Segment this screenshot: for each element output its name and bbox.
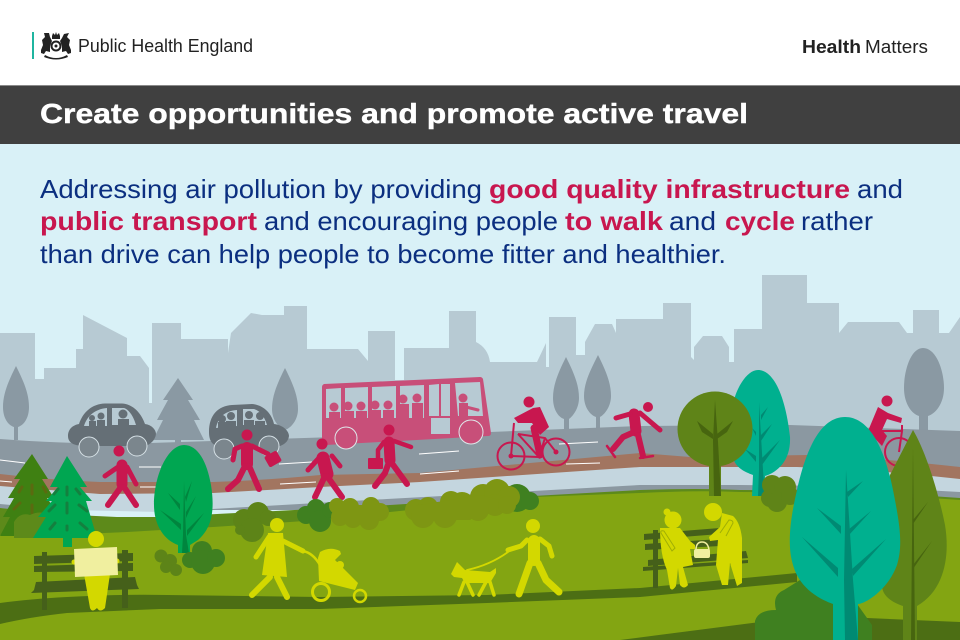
cyclist 1	[498, 396, 570, 470]
big teal tree	[790, 417, 900, 640]
round olive tree	[678, 392, 752, 496]
header: Health Matters	[802, 37, 928, 57]
pedestrians on road	[105, 424, 411, 505]
background grey trees	[3, 348, 944, 446]
person walking 1	[105, 446, 136, 505]
pushchair	[312, 549, 366, 602]
olive bush right	[761, 475, 799, 512]
mustard bush 2	[405, 479, 520, 528]
olive bush	[233, 502, 276, 542]
bus	[322, 377, 491, 449]
person reading newspaper	[72, 531, 120, 610]
cyclist 2	[868, 396, 913, 466]
green bush behind	[503, 484, 539, 512]
intro text: and	[669, 206, 716, 236]
title bar	[0, 85, 960, 144]
header: Health Matters: Health	[802, 37, 861, 57]
intro text: public transport	[40, 206, 257, 236]
bench right	[643, 528, 748, 588]
couple with handbag	[660, 503, 742, 590]
mustard bush 1	[329, 497, 389, 530]
green tree centre-left	[154, 445, 213, 553]
city skyline	[0, 275, 960, 460]
big dark bush	[755, 580, 872, 640]
pine green	[33, 456, 97, 547]
tall olive tree	[882, 430, 947, 640]
intro text	[40, 174, 903, 269]
footpath	[0, 573, 797, 624]
road	[0, 425, 960, 510]
intro text: cycle	[725, 206, 795, 236]
car 1	[68, 404, 156, 457]
header: Health Matters: Matters	[865, 37, 928, 57]
cycle lane	[0, 453, 960, 494]
sky background	[0, 144, 960, 640]
intro text: Addressing air pollution by providing	[40, 174, 482, 204]
man	[704, 503, 742, 586]
person with briefcase	[228, 430, 282, 489]
pavement	[0, 462, 960, 512]
man walking dog	[451, 519, 559, 595]
car 2	[209, 404, 289, 459]
teal tree behind	[733, 370, 790, 496]
person with bag	[368, 424, 411, 486]
intro text: and encouraging people	[264, 206, 558, 236]
green bush	[297, 499, 338, 532]
road markings	[0, 442, 600, 487]
skater	[607, 402, 660, 458]
person with backpack	[308, 438, 342, 497]
intro text: good quality infrastructure	[489, 174, 850, 204]
woman	[660, 508, 695, 590]
grass far	[0, 489, 960, 640]
woman with pushchair	[252, 518, 366, 602]
intro text: to walk	[565, 206, 664, 236]
header: Public Health England logo	[32, 32, 253, 60]
pine trees left	[0, 454, 97, 547]
cars	[68, 404, 289, 459]
bench left	[31, 550, 139, 610]
bushes along path	[233, 479, 539, 542]
bush by pine	[14, 512, 50, 538]
icon: royal crest	[41, 32, 71, 60]
foreground dark ground	[620, 618, 960, 640]
dog	[451, 562, 496, 595]
intro text: than drive can help people to become fitter and healthier.	[40, 239, 726, 269]
header: Public Health England logo: Public Health England	[78, 35, 253, 56]
green bush by tree	[182, 541, 225, 574]
pine dark	[0, 454, 60, 536]
title bar: Create opportunities and promote active travel	[40, 98, 748, 129]
handbag	[694, 542, 710, 558]
intro text: and	[857, 174, 903, 204]
bushes mid left	[154, 550, 182, 576]
intro text: rather	[801, 206, 873, 236]
grass near	[0, 491, 960, 640]
